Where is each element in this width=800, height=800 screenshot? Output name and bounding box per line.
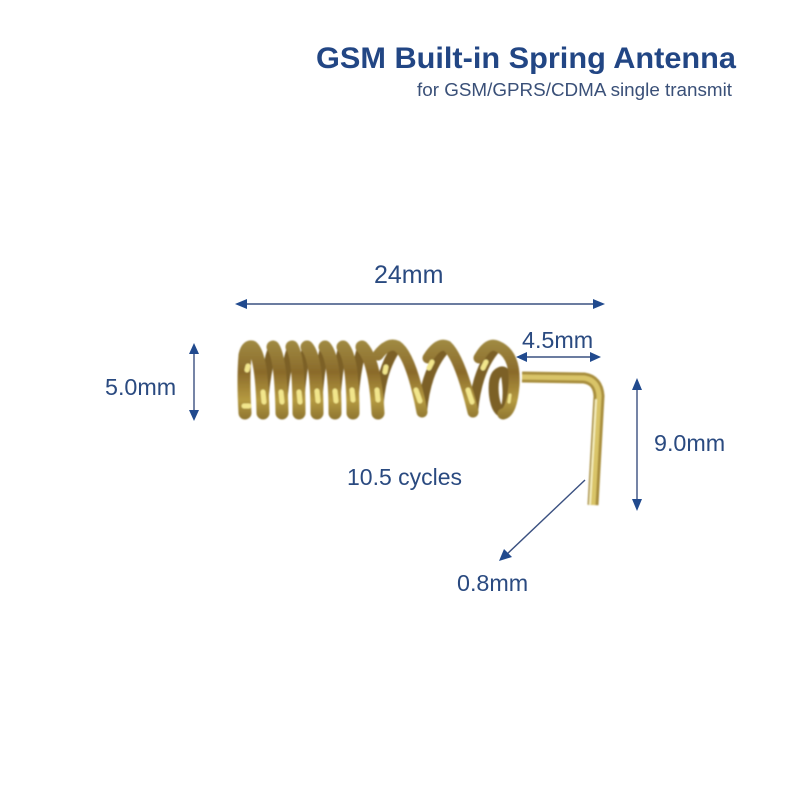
lead wire xyxy=(522,377,599,505)
dimension: 24mm xyxy=(235,261,605,309)
wide coil strands xyxy=(378,345,514,414)
title: GSM Built-in Spring Antenna xyxy=(316,42,736,75)
coil front strands xyxy=(244,347,378,413)
label: 10.5 cycles: 10.5 cycles xyxy=(347,464,462,490)
spring antenna illustration xyxy=(244,345,599,505)
dimension: 0.8mm: 0.8mm xyxy=(457,570,528,596)
dimension: 5.0mm xyxy=(105,343,199,421)
dimension: 24mm: 24mm xyxy=(374,261,443,289)
dimension: 4.5mm xyxy=(516,327,601,362)
dimension: 9.0mm: 9.0mm xyxy=(654,430,725,456)
coil highlights xyxy=(244,362,510,406)
dimension: 0.8mm xyxy=(457,480,585,596)
dimension: 9.0mm xyxy=(632,378,725,511)
dimension: 4.5mm: 4.5mm xyxy=(522,327,593,353)
dimension: 5.0mm: 5.0mm xyxy=(105,374,176,400)
back strands xyxy=(263,347,508,413)
subtitle: for GSM/GPRS/CDMA single transmit xyxy=(417,80,732,100)
